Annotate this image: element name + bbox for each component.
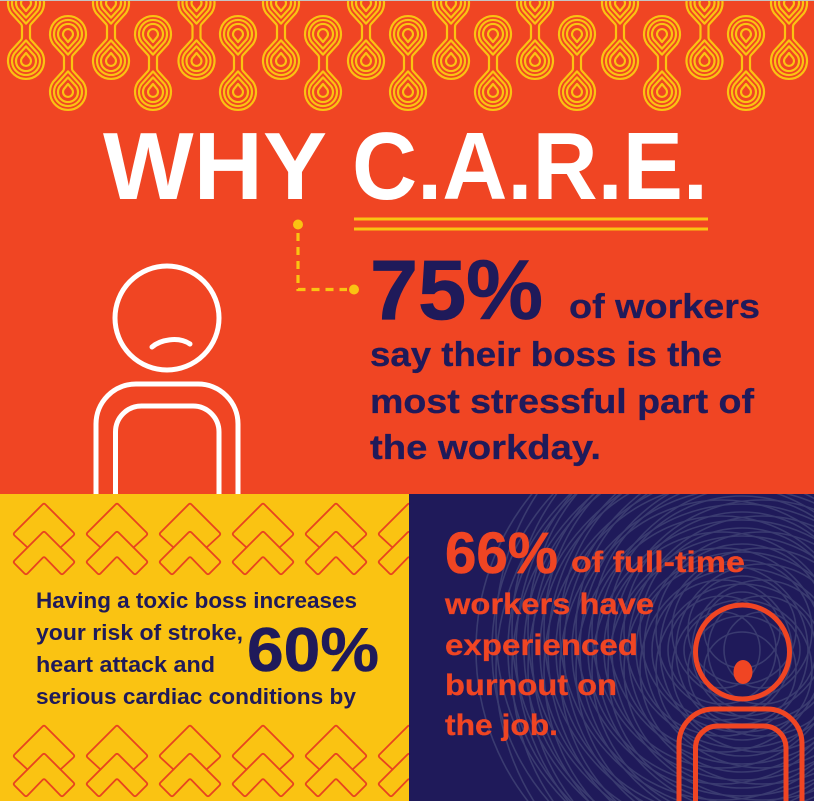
decorative chevrons	[14, 504, 439, 796]
stat: 75 percent: say their boss is the	[370, 336, 722, 374]
icon: burned-out worker	[679, 605, 802, 801]
stat: 75 percent	[370, 243, 760, 467]
burnout text: burnout on	[445, 669, 617, 702]
panel: navy burnout	[409, 494, 814, 801]
burnout text	[444, 521, 745, 742]
title double underline	[354, 219, 708, 229]
title: C.A.R.E.	[352, 113, 708, 220]
decorative pattern: yellow hourglass drops	[8, 0, 807, 110]
panel: yellow cardiac risk	[0, 494, 439, 801]
stat: 75 percent: most stressful part of	[370, 383, 755, 421]
dotted connector	[293, 220, 359, 294]
burnout text: experienced	[445, 629, 638, 662]
stat: 75 percent: of workers	[569, 288, 760, 326]
cardiac text: 60%	[247, 616, 379, 685]
burnout text: 66%	[445, 521, 558, 586]
cardiac text	[36, 588, 379, 709]
cardiac text: Having a toxic boss increases	[36, 588, 357, 613]
burnout text: of full-time	[571, 546, 745, 579]
cardiac text: serious cardiac conditions by	[36, 684, 357, 709]
cardiac text: heart attack and	[36, 652, 215, 677]
cardiac text: your risk of stroke,	[36, 620, 243, 645]
burnout text: workers have	[444, 588, 654, 621]
panel: orange header	[0, 0, 814, 111]
burnout text: the job.	[445, 709, 558, 742]
title	[103, 113, 708, 220]
stat: 75 percent: the workday.	[370, 429, 601, 467]
icon: stressed worker	[96, 266, 238, 494]
decorative rings	[475, 494, 814, 801]
stat: 75 percent: 75%	[370, 243, 543, 337]
title: WHY	[103, 113, 327, 220]
